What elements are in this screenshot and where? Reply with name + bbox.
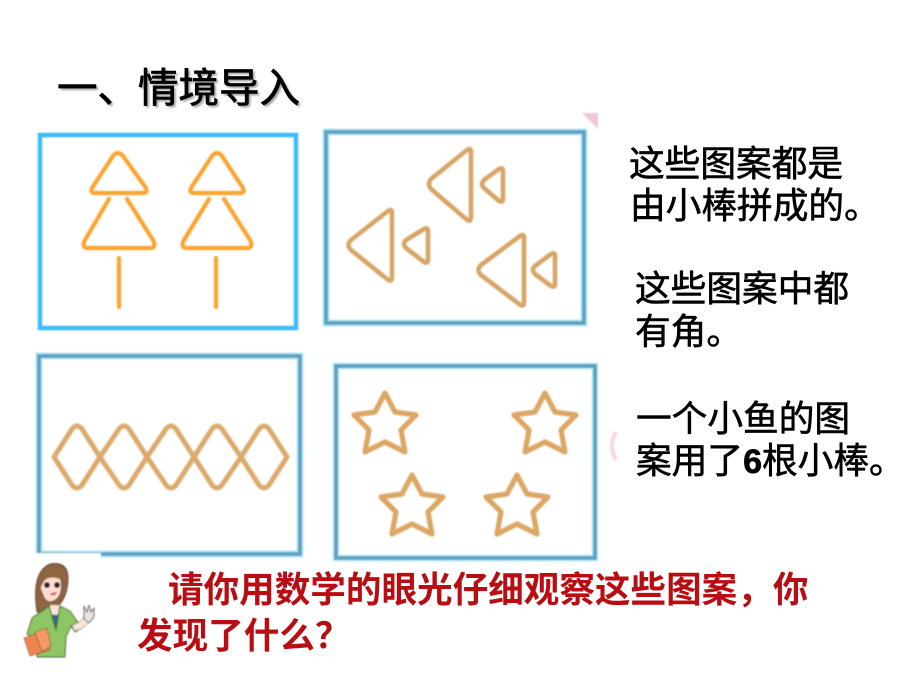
panel: stars — [336, 366, 595, 558]
icon: pink corner — [582, 113, 598, 129]
panel: diamonds — [39, 356, 300, 554]
question line 2: 发现了什么？ — [137, 616, 350, 656]
icon: teacher — [24, 564, 94, 657]
title: 一、情境导入 — [57, 65, 300, 111]
panel: trees — [40, 135, 296, 328]
text block: observations about the patterns — [629, 144, 905, 481]
question line 1: 请你用数学的眼光仔细观察这些图案，你 — [168, 570, 808, 610]
line 1: 这些图案都是 — [629, 144, 843, 184]
line 5: 一个小鱼的图 — [636, 399, 850, 439]
line 4: 有角。 — [635, 312, 742, 352]
icon: pink arc — [612, 432, 616, 460]
callout: question — [137, 570, 808, 656]
line 6: 案用了6根小棒。 — [636, 441, 905, 481]
line 2: 由小棒拼成的。 — [630, 186, 880, 226]
white patch over panel corner — [30, 553, 101, 565]
line 3: 这些图案中都 — [635, 269, 849, 309]
panel: fish — [326, 132, 584, 323]
